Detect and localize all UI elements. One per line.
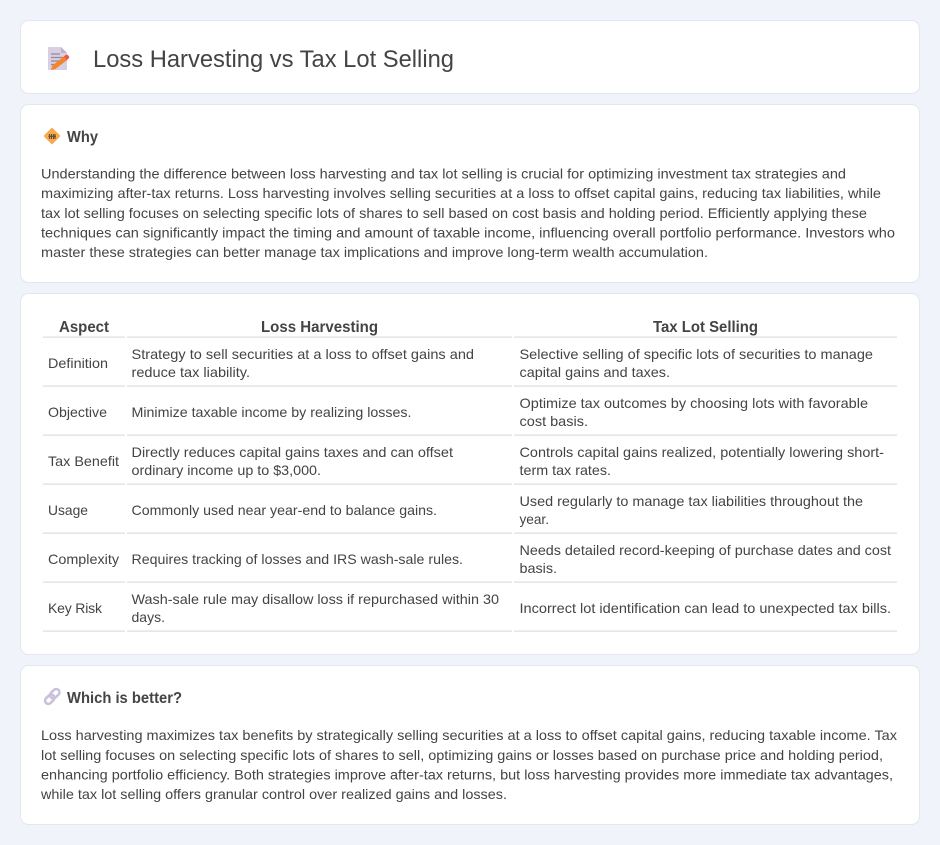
row: definition: reduce tax liability. <box>132 364 250 380</box>
row: complexity: Complexity <box>48 551 119 567</box>
panel: comparison table <box>20 294 920 654</box>
row: key risk <box>43 591 897 632</box>
row: definition: Definition <box>48 355 108 371</box>
row: tax benefit <box>43 444 897 485</box>
row: usage <box>43 493 897 534</box>
row: tax benefit: Tax Benefit <box>48 453 119 469</box>
row: key risk: days. <box>132 609 165 625</box>
icon: chain link <box>44 688 61 705</box>
table header row: Aspect <box>59 319 110 336</box>
heading: which is better: Which is better? <box>67 690 182 707</box>
row: usage: Used regularly to manage tax liabilities throughout the <box>520 493 863 509</box>
row: objective: Optimize tax outcomes by choosing lots with favorable <box>520 395 868 411</box>
icon: document with pencil <box>48 47 69 70</box>
row: objective: Minimize taxable income by realizing losses. <box>132 404 412 420</box>
why paragraph: tax lot selling focuses on selecting specific lots of shares to sell based on cost basis and holding period. Efficiently applying these <box>41 205 867 221</box>
table header row <box>43 319 897 338</box>
row: usage: Commonly used near year-end to balance gains. <box>132 502 437 518</box>
why paragraph: Understanding the difference between loss harvesting and tax lot selling is crucial for optimizing investment tax strategies and <box>41 166 846 182</box>
row: usage: Usage <box>48 502 88 518</box>
which is better paragraph: Loss harvesting maximizes tax benefits by strategically selling securities at a loss to offset capital gains, reducing taxable income. Tax <box>41 727 897 743</box>
row: complexity <box>43 542 897 583</box>
row: definition: Selective selling of specific lots of securities to manage <box>520 346 873 362</box>
row: definition: capital gains and taxes. <box>520 364 670 380</box>
row: complexity: Requires tracking of losses and IRS wash-sale rules. <box>132 551 463 567</box>
row: key risk: Incorrect lot identification can lead to unexpected tax bills. <box>520 600 891 616</box>
table header row: Loss Harvesting <box>261 319 378 336</box>
panel: title <box>20 20 920 94</box>
why paragraph: master these strategies can better manage tax implications and improve long-term wealth accumulation. <box>41 244 708 260</box>
which is better paragraph: while tax lot selling offers granular control over realized gains and losses. <box>40 786 507 802</box>
row: key risk: Key Risk <box>48 600 103 616</box>
icon: orange diamond sign <box>44 128 60 144</box>
panel: which is better <box>20 666 920 824</box>
which is better paragraph <box>40 727 897 802</box>
which is better paragraph: enhancing portfolio efficiency. Both strategies improve after-tax returns, but loss harvesting provides more immediate tax advantages, <box>41 766 893 782</box>
row: objective: cost basis. <box>520 413 588 429</box>
panel: why <box>20 104 920 282</box>
row: objective <box>43 395 897 436</box>
row: tax benefit: term tax rates. <box>520 462 611 478</box>
row: complexity: basis. <box>520 560 557 576</box>
row: definition <box>43 346 897 387</box>
row: objective: Objective <box>48 404 107 420</box>
row: definition: Strategy to sell securities at a loss to offset gains and <box>132 346 474 362</box>
why paragraph <box>41 166 895 260</box>
row: complexity: Needs detailed record-keeping of purchase dates and cost <box>520 542 891 558</box>
why paragraph: techniques can significantly impact the timing and amount of taxable income, influencing overall portfolio performance. Investors who <box>41 224 895 240</box>
why paragraph: maximizing after-tax returns. Loss harvesting involves selling securities at a loss to offset capital gains, reducing tax liabilities, while <box>41 185 881 201</box>
which is better paragraph: lot selling focuses on selecting specific lots of shares to sell, optimizing gains or losses based on purchase price and holding period, <box>41 747 883 763</box>
title text: Loss Harvesting vs Tax Lot Selling <box>93 46 454 73</box>
row: key risk: Wash-sale rule may disallow loss if repurchased within 30 <box>132 591 499 607</box>
row: tax benefit: ordinary income up to $3,000. <box>132 462 321 478</box>
table header row: Tax Lot Selling <box>653 319 758 336</box>
row: usage: year. <box>520 511 549 527</box>
row: tax benefit: Controls capital gains realized, potentially lowering short- <box>520 444 884 460</box>
row: tax benefit: Directly reduces capital gains taxes and can offset <box>132 444 453 460</box>
heading: why: Why <box>67 129 98 146</box>
